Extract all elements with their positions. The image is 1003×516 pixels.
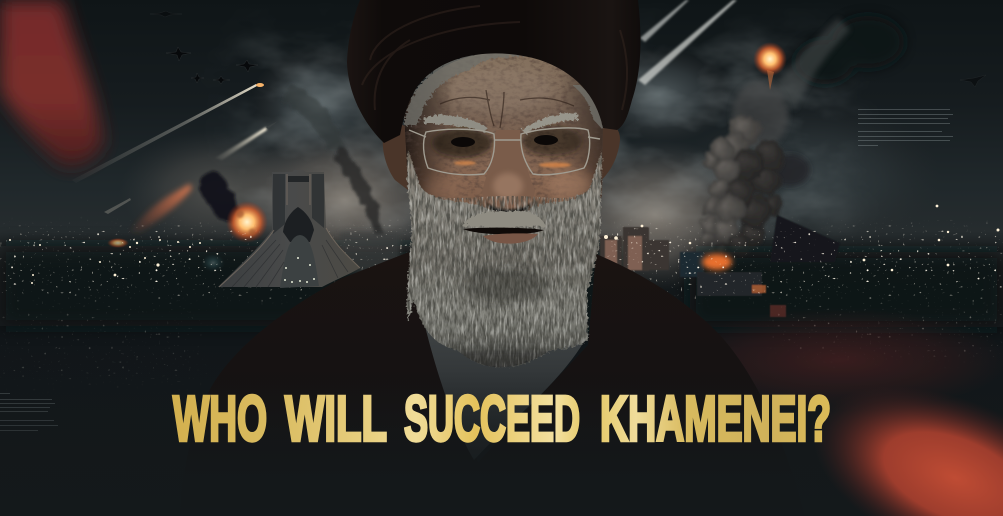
portrait figure bbox=[258, 0, 756, 446]
fighter jets bbox=[150, 11, 986, 87]
red light streak: top left bbox=[0, 0, 103, 166]
turban bbox=[347, 0, 640, 143]
smoke column: right bbox=[700, 16, 904, 258]
smoke columns: left bbox=[198, 85, 386, 236]
faint text block: right bbox=[858, 109, 953, 146]
shirt collar bbox=[420, 305, 588, 460]
hairline wisps bbox=[404, 52, 603, 130]
buildings and rooftops bbox=[600, 215, 840, 317]
faint text block: left bbox=[0, 393, 58, 431]
bottom fade bbox=[0, 370, 1003, 516]
forehead wrinkles bbox=[440, 90, 574, 128]
night sky background bbox=[0, 30, 1003, 282]
face bbox=[403, 53, 604, 212]
title: WHO bbox=[173, 382, 267, 454]
moustache and mouth bbox=[462, 211, 546, 228]
glasses reflections bbox=[454, 161, 571, 168]
glasses bbox=[409, 128, 600, 175]
eye sockets bbox=[432, 128, 492, 158]
title: SUCCEED bbox=[404, 382, 580, 454]
title: WILL bbox=[285, 382, 387, 454]
title bbox=[173, 382, 831, 454]
city skyline bbox=[0, 204, 1003, 388]
monument: Azadi Tower bbox=[218, 170, 360, 288]
missile trails bbox=[72, 0, 737, 232]
eyebrows bbox=[424, 115, 488, 132]
title: KHAMENEI? bbox=[600, 382, 831, 454]
nose bbox=[482, 130, 535, 208]
robe bbox=[180, 252, 805, 516]
explosions bbox=[107, 42, 787, 272]
red light band: lower right bbox=[670, 310, 1003, 420]
ears bbox=[383, 124, 620, 190]
beard bbox=[400, 150, 610, 376]
red light glow: bottom right bbox=[740, 330, 1003, 516]
